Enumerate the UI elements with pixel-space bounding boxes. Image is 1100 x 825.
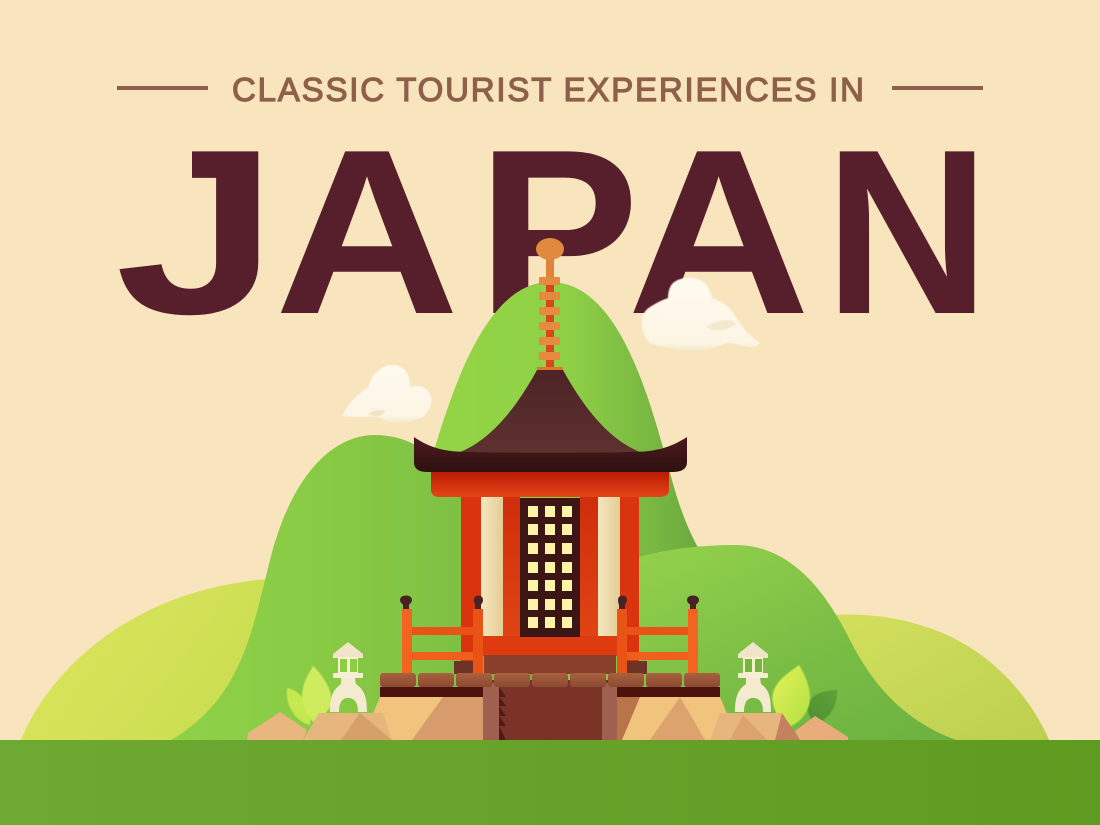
lit lattice window (520, 498, 580, 637)
hill: main right (540, 545, 962, 742)
platform front (484, 655, 616, 674)
leaves: right (772, 665, 837, 727)
cloud: small left (342, 365, 431, 423)
red beam (431, 463, 669, 497)
title: JAPAN: J (115, 101, 278, 363)
pagoda spire (536, 238, 564, 372)
hill: main left (168, 435, 560, 742)
bricks (380, 673, 720, 687)
stair posts (483, 683, 499, 740)
rocks: right (617, 697, 848, 740)
railing: left (400, 596, 483, 674)
title: JAPAN (115, 101, 990, 364)
stair serrations (499, 687, 506, 740)
lower columns and walls (461, 490, 639, 662)
back hill: right yellow (815, 615, 1050, 742)
title: JAPAN: A (627, 101, 810, 363)
back hill: left yellow (20, 578, 330, 742)
stone platform with bricks (380, 673, 720, 740)
roof upper (450, 370, 650, 460)
cloud: large right (642, 278, 760, 351)
rocks: left (247, 697, 484, 740)
railing: right (617, 596, 699, 674)
lantern: left (330, 642, 367, 712)
pagoda building (414, 370, 687, 674)
leaves: left (287, 666, 332, 725)
lantern: right (735, 642, 771, 712)
hill: tall centre (420, 282, 705, 600)
title: JAPAN: A (274, 101, 459, 364)
heading: subtitle with side rules: CLASSIC TOURIST EXPERIENCES IN (232, 71, 864, 108)
title: JAPAN: P (477, 101, 639, 363)
ground (0, 740, 1100, 825)
eaves (414, 437, 687, 472)
title: JAPAN: N (824, 101, 990, 364)
